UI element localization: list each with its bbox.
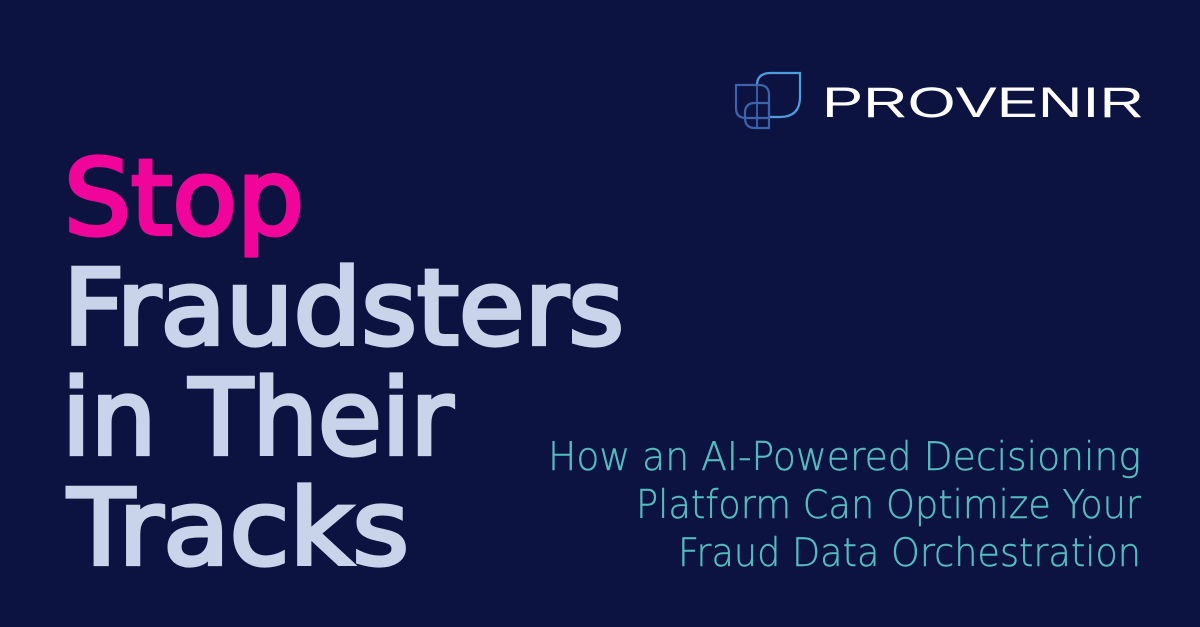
logo: Provenir [736, 73, 1144, 128]
headline line: Fraudsters: Fraudsters [63, 247, 624, 369]
headline line: Tracks: Tracks [67, 467, 409, 589]
wordmark: PROVENIR [822, 79, 1144, 127]
subtitle line 1: How an AI-Powered Decisioning [548, 435, 1141, 480]
icon: overlapping squares [736, 73, 800, 128]
headline line: in Their: in Their [62, 357, 453, 479]
subtitle line 3: Fraud Data Orchestration [678, 531, 1141, 576]
subtitle line 2: Platform Can Optimize Your [636, 483, 1141, 528]
headline [62, 137, 624, 589]
headline word: Stop: Stop [64, 137, 304, 259]
subtitle [548, 435, 1141, 576]
